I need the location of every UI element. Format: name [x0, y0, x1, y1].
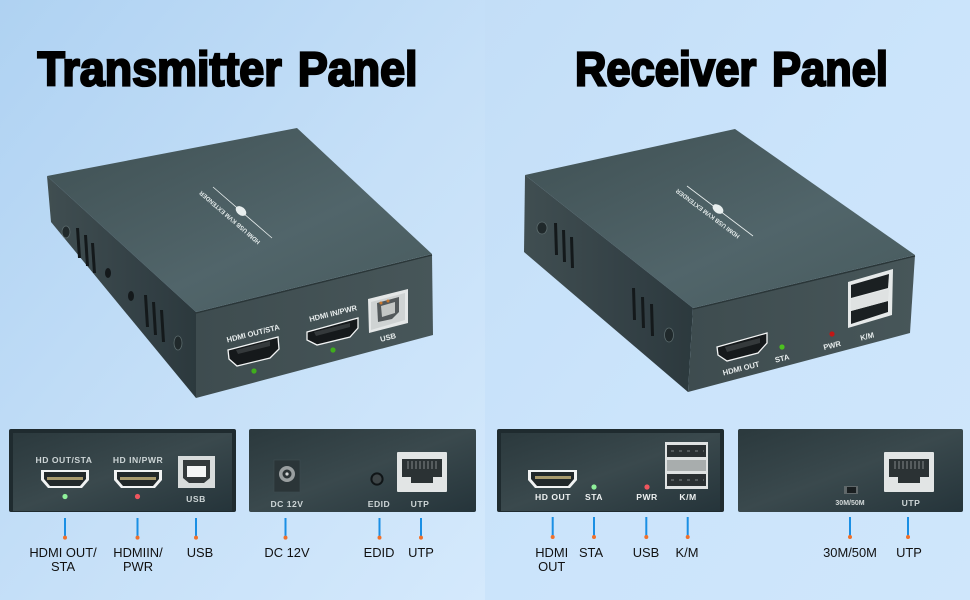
- USB label: USB: [186, 494, 206, 504]
- callout: USB: USB: [633, 545, 659, 560]
- receiver side vents: [554, 223, 654, 336]
- receiver HDMI OUT label: HDMI OUT: [722, 359, 761, 377]
- transmitter green LED 2: [330, 347, 336, 353]
- transmitter top face: [47, 128, 432, 312]
- transmitter side face: [47, 176, 196, 398]
- STA label: STA: [585, 492, 603, 502]
- transmitter USB port: [368, 289, 408, 333]
- title: Receiver Panel: Receiver Panel: [575, 44, 888, 96]
- transmitter HDMI OUT port: [228, 337, 279, 366]
- callout: UTP: [408, 518, 434, 560]
- HD OUT/STA label: HD OUT/STA: [36, 455, 92, 465]
- K/M label: K/M: [679, 492, 697, 502]
- HD OUT label: HD OUT: [535, 492, 571, 502]
- panel: transmitter rear view: [249, 429, 476, 512]
- PWR LED: [644, 484, 650, 490]
- callout: HDMIIN/PWR: PWR: [123, 559, 153, 574]
- transmitter side vents: [76, 228, 165, 342]
- callout: UTP: [896, 517, 922, 560]
- callout: EDID: [364, 518, 394, 560]
- receiver HDMI port: [717, 333, 767, 361]
- receiver side face: [524, 175, 693, 392]
- callouts: receiver: [535, 517, 922, 574]
- callout: HDMI OUT: OUT: [538, 559, 565, 574]
- UTP label: UTP: [411, 499, 429, 509]
- transmitter green LED 1: [251, 368, 257, 374]
- callout: HDMIIN/PWR: HDMIIN/: [113, 545, 163, 560]
- receiver PWR label: PWR: [822, 339, 842, 352]
- callout: USB: [633, 517, 659, 560]
- UTP port: [397, 452, 447, 492]
- callout: HDMI OUT/STA: HDMI OUT/: [29, 545, 97, 560]
- callout: UTP: UTP: [408, 545, 434, 560]
- callouts: transmitter: [29, 518, 434, 574]
- panel: receiver rear view: [738, 429, 963, 512]
- receiver USB stack: [848, 269, 893, 328]
- STA LED: [591, 484, 597, 490]
- callout: 30M/50M: 30M/50M: [823, 545, 877, 560]
- transmitter front face: [196, 254, 433, 398]
- title: Transmitter Panel: Transmitter Panel: [38, 44, 418, 96]
- transmitter HDMI IN label: HDMI IN/PWR: [308, 303, 358, 324]
- device: receiver 3D view: [524, 129, 915, 392]
- callout: DC 12V: [264, 518, 310, 560]
- callout: K/M: [676, 517, 698, 560]
- callout: USB: [187, 518, 213, 560]
- red LED: [135, 494, 140, 499]
- background: transmitter side: [0, 0, 485, 600]
- callout: DC 12V: DC 12V: [264, 545, 310, 560]
- DC 12V label: DC 12V: [270, 499, 304, 509]
- HDMI port: [528, 470, 577, 488]
- transmitter side screws: [62, 226, 182, 350]
- callout: HDMI OUT/STA: [29, 518, 97, 574]
- transmitter HDMI OUT label: HDMI OUT/STA: [226, 322, 281, 344]
- HDMI port 2: [114, 470, 162, 488]
- receiver STA LED: [779, 344, 785, 350]
- callout: 30M/50M: [823, 517, 877, 560]
- HD IN/PWR label: HD IN/PWR: [113, 455, 163, 465]
- EDID button: [370, 472, 384, 486]
- DIP switch: [844, 486, 858, 494]
- background: receiver side: [485, 0, 970, 600]
- EDID label: EDID: [368, 499, 390, 509]
- HDMI port 1: [41, 470, 89, 488]
- PWR label: PWR: [636, 492, 658, 502]
- callout: STA: STA: [579, 545, 603, 560]
- receiver K/M label: K/M: [859, 330, 875, 343]
- callout: USB: USB: [187, 545, 213, 560]
- receiver front face: [688, 255, 915, 392]
- device: transmitter 3D view: [47, 128, 433, 398]
- panel: receiver front view: [497, 429, 724, 512]
- transmitter top logo: HDMI USB KVM EXTENDER: [198, 189, 262, 245]
- callout: HDMI OUT/STA: STA: [51, 559, 75, 574]
- receiver PWR LED: [829, 331, 835, 337]
- USB stack: [665, 442, 708, 489]
- UTP port: [884, 452, 934, 492]
- 30M/50M label: 30M/50M: [835, 500, 865, 507]
- receiver top face: [525, 129, 915, 308]
- receiver side screws: [537, 222, 674, 342]
- callout: HDMIIN/PWR: [113, 518, 163, 574]
- receiver top logo: HDMI USB KVM EXTENDER: [674, 187, 741, 239]
- panel: transmitter front view: [9, 429, 236, 512]
- green LED: [62, 494, 68, 499]
- callout: HDMI OUT: HDMI: [535, 545, 568, 560]
- callout: EDID: EDID: [364, 545, 394, 560]
- receiver STA label: STA: [774, 352, 791, 365]
- USB-B port: [178, 456, 215, 488]
- DC jack: [274, 460, 300, 492]
- transmitter USB label: USB: [379, 331, 397, 344]
- callout: UTP: UTP: [896, 545, 922, 560]
- callout: K/M: K/M: [676, 545, 698, 560]
- callout: HDMI OUT: [535, 517, 568, 574]
- callout: STA: [579, 517, 603, 560]
- UTP label: UTP: [902, 498, 920, 508]
- transmitter HDMI IN port: [307, 318, 358, 345]
